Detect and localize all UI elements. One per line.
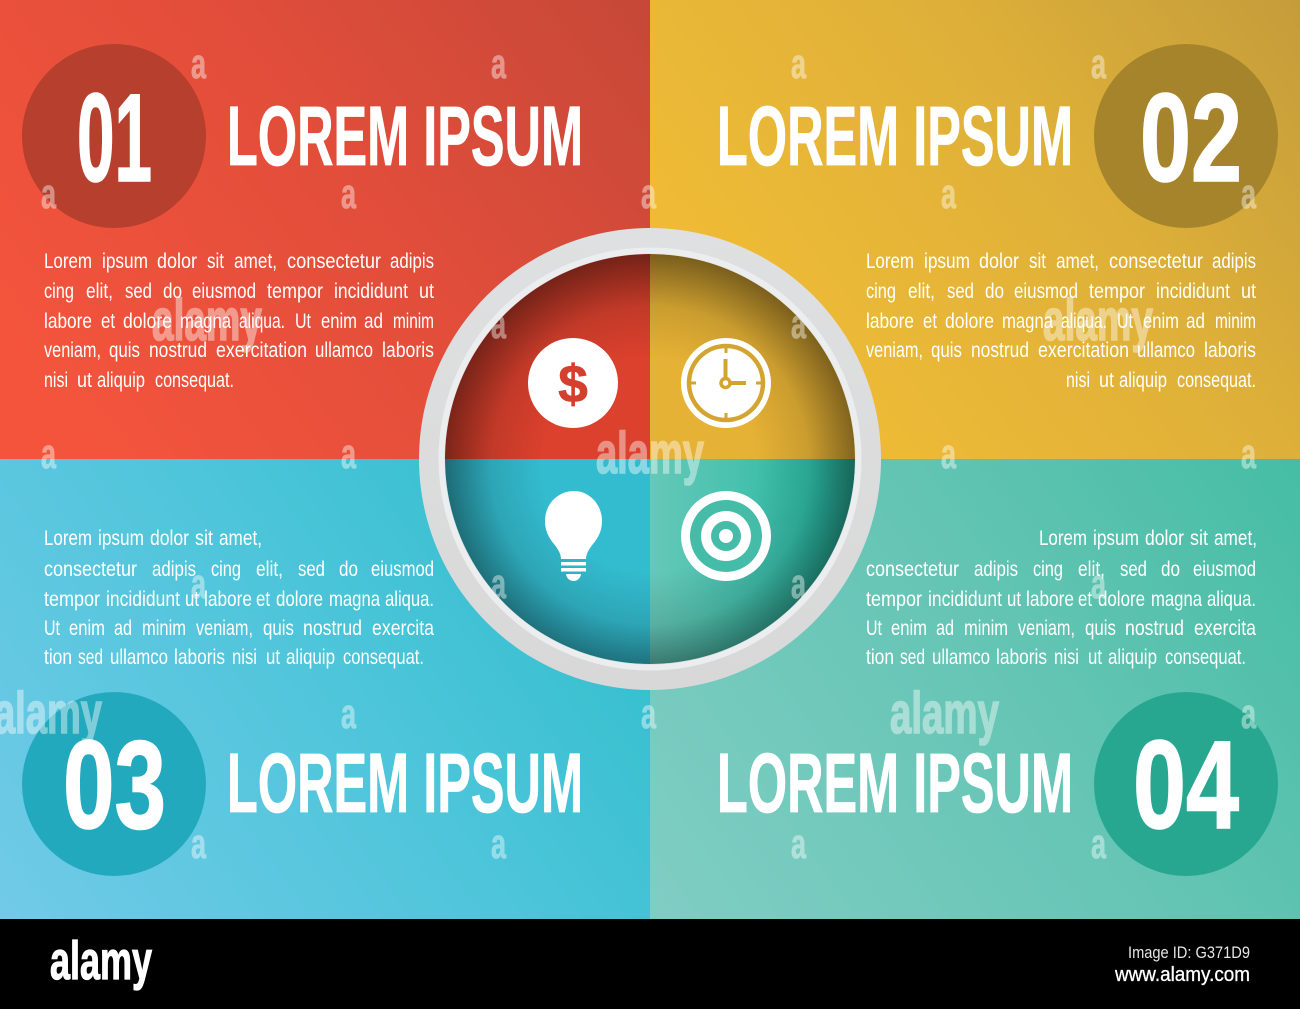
- text block 3: ut: [185, 587, 199, 611]
- text block 3: sit: [195, 526, 213, 550]
- text block 4: sit: [1190, 526, 1208, 550]
- text block 4: enim: [891, 616, 927, 640]
- text block 2: cing: [866, 279, 896, 303]
- text block 2: sit: [1029, 249, 1046, 273]
- number badge 02: 02: [1140, 69, 1242, 208]
- text block 4: veniam,: [1018, 616, 1075, 640]
- watermark letters: a: [1241, 690, 1256, 737]
- heading 4: LOREM IPSUM: [717, 736, 1073, 830]
- watermark letters: a: [41, 430, 56, 477]
- text block 4: ut: [1088, 645, 1102, 669]
- text block 1: labore: [44, 309, 92, 333]
- text block 3: nostrud: [303, 616, 362, 640]
- watermark letters: a: [1091, 40, 1106, 87]
- text block 3: incididunt: [106, 587, 180, 611]
- text block 4: cing: [1033, 557, 1063, 581]
- text block 1: tempor: [267, 279, 323, 303]
- text block 2: ad: [1186, 309, 1205, 333]
- text block 3: ad: [114, 616, 132, 640]
- watermark letters: a: [491, 560, 506, 607]
- watermark letters: a: [791, 40, 806, 87]
- panel: red quadrant: [0, 0, 650, 459]
- text block 1: quis: [109, 338, 140, 362]
- text block 3: labore: [204, 587, 252, 611]
- text block 1: et: [101, 309, 115, 333]
- watermark letters: [41, 40, 1256, 867]
- text block 2: ut: [1099, 368, 1114, 392]
- watermark letters: a: [491, 300, 506, 347]
- text block 1: nisi: [44, 368, 68, 392]
- text block 3: aliquip: [286, 645, 335, 669]
- text block 2: magna: [1002, 309, 1053, 333]
- text block 2: [866, 249, 1256, 392]
- central circle quadrants: [440, 250, 860, 669]
- text block 4: laboris: [996, 645, 1047, 669]
- text block 2: eiusmod: [1014, 279, 1078, 303]
- text block 4: consequat.: [1165, 645, 1246, 669]
- text block 2: consectetur: [1109, 249, 1203, 273]
- text block 4: Lorem: [1039, 526, 1087, 550]
- text block 2: amet,: [1056, 249, 1099, 273]
- text block 1: ullamco: [315, 338, 373, 362]
- text block 4: ad: [936, 616, 954, 640]
- text block 1: [44, 249, 434, 392]
- text block 2: Ut: [1117, 309, 1133, 333]
- text block 4: ut: [1007, 587, 1021, 611]
- text block 3: [44, 526, 434, 669]
- text block 1: aliquip: [97, 368, 145, 392]
- text block 3: minim: [142, 616, 186, 640]
- text block 3: Ut: [44, 616, 60, 640]
- text block 3: enim: [69, 616, 105, 640]
- watermark letters: a: [491, 40, 506, 87]
- icon: light bulb: [545, 491, 602, 581]
- text block 3: consectetur: [44, 557, 137, 581]
- text block 3: nisi: [232, 645, 257, 669]
- watermark letters: a: [191, 560, 206, 607]
- text block 2: laboris: [1204, 338, 1256, 362]
- text block 4: nostrud: [1125, 616, 1184, 640]
- text block 3: ullamco: [110, 645, 168, 669]
- text block 1: magna: [180, 309, 231, 333]
- text block 1: veniam,: [44, 338, 101, 362]
- text block 2: nostrud: [971, 338, 1029, 362]
- text block 4: exercita: [1194, 616, 1256, 640]
- text block 2: adipis: [1212, 249, 1256, 273]
- text block 1: Ut: [295, 309, 311, 333]
- text block 2: sed: [947, 279, 974, 303]
- number badge 01: [22, 44, 206, 228]
- text block 4: [866, 526, 1257, 669]
- text block 4: Ut: [866, 616, 882, 640]
- text block 4: ullamco: [932, 645, 990, 669]
- text block 1: Lorem: [44, 249, 92, 273]
- text block 1: dolor: [157, 249, 197, 273]
- text block 2: aliqua.: [1061, 309, 1107, 333]
- text block 3: dolore: [276, 587, 323, 611]
- number badge 04: [1094, 692, 1278, 876]
- watermark letters: a: [341, 690, 356, 737]
- text block 4: aliquip: [1108, 645, 1157, 669]
- text block 2: nisi: [1066, 368, 1090, 392]
- text block 2: do: [985, 279, 1004, 303]
- text block 1: ad: [364, 309, 383, 333]
- text block 2: enim: [1143, 309, 1179, 333]
- panel: teal quadrant: [650, 459, 1300, 919]
- number badge 03: 03: [63, 716, 166, 855]
- text block 1: dolore: [123, 309, 172, 333]
- watermark letters: a: [1091, 560, 1106, 607]
- text block 4: incididunt: [928, 587, 1002, 611]
- text block 1: minim: [393, 309, 434, 333]
- text block 3: aliqua.: [385, 587, 434, 611]
- text block 3: elit,: [256, 557, 283, 581]
- text block 2: exercitation: [1038, 338, 1129, 362]
- watermark letters: a: [941, 170, 956, 217]
- text block 3: ut: [266, 645, 280, 669]
- text block 2: veniam,: [866, 338, 923, 362]
- text block 3: do: [339, 557, 358, 581]
- text block 3: amet,: [219, 526, 262, 550]
- heading 1: LOREM IPSUM: [227, 89, 583, 183]
- grey ring around central circle: [419, 228, 881, 690]
- text block 1: cing: [44, 279, 74, 303]
- text block 3: sed: [78, 645, 103, 669]
- text block 2: elit,: [908, 279, 935, 303]
- text block 3: exercita: [372, 616, 434, 640]
- icon: target: [681, 491, 771, 581]
- number badge 04: 04: [1133, 716, 1239, 855]
- number badge 03: [22, 692, 206, 876]
- text block 2: ut: [1241, 279, 1256, 303]
- text block 1: consequat.: [155, 368, 234, 392]
- text block 2: minim: [1215, 309, 1256, 333]
- text block 2: ullamco: [1137, 338, 1195, 362]
- text block 2: et: [923, 309, 937, 333]
- text block 3: tion: [44, 645, 72, 669]
- number badge 01: 01: [77, 69, 152, 208]
- text block 4: dolore: [1098, 587, 1145, 611]
- watermark letters: a: [1241, 170, 1256, 217]
- text block 1: laboris: [382, 338, 434, 362]
- watermark letters: a: [791, 820, 806, 867]
- watermark letters: a: [41, 170, 56, 217]
- watermark letters: a: [1241, 430, 1256, 477]
- icon: dollar coin: [528, 338, 618, 428]
- text block 1: consectetur: [287, 249, 381, 273]
- watermark letters: a: [791, 300, 806, 347]
- watermark logos: alamy: [152, 288, 262, 353]
- text block 4: labore: [1026, 587, 1074, 611]
- text block 1: ut: [77, 368, 92, 392]
- text block 2: aliquip: [1119, 368, 1167, 392]
- text block 3: cing: [211, 557, 241, 581]
- watermark letters: a: [641, 170, 656, 217]
- watermark logos: [0, 288, 1153, 746]
- watermark letters: a: [341, 170, 356, 217]
- text block 3: dolor: [150, 526, 189, 550]
- text block 1: sed: [125, 279, 152, 303]
- text block 1: exercitation: [216, 338, 307, 362]
- watermark logos: alamy: [890, 681, 999, 746]
- text block 4: sed: [1120, 557, 1147, 581]
- text block 4: do: [1161, 557, 1180, 581]
- text block 3: ipsum: [98, 526, 144, 550]
- text block 3: consequat.: [343, 645, 424, 669]
- text block 4: magna: [1151, 587, 1202, 611]
- text block 4: quis: [1085, 616, 1116, 640]
- panel: yellow quadrant: [650, 0, 1300, 459]
- watermark letters: a: [791, 560, 806, 607]
- text block 4: minim: [964, 616, 1008, 640]
- text block 3: eiusmod: [371, 557, 434, 581]
- text block 4: sed: [900, 645, 925, 669]
- text block 1: amet,: [234, 249, 277, 273]
- watermark letters: a: [641, 690, 656, 737]
- text block 3: tempor: [44, 587, 100, 611]
- text block 3: quis: [263, 616, 294, 640]
- text block 1: aliqua.: [239, 309, 285, 333]
- text block 4: elit,: [1078, 557, 1105, 581]
- text block 3: laboris: [174, 645, 225, 669]
- text block 4: tion: [866, 645, 894, 669]
- text block 2: incididunt: [1156, 279, 1230, 303]
- text block 1: ut: [419, 279, 434, 303]
- text block 4: dolor: [1145, 526, 1184, 550]
- text block 1: elit,: [86, 279, 113, 303]
- text block 1: do: [163, 279, 182, 303]
- text block 4: amet,: [1214, 526, 1257, 550]
- text block 1: eiusmod: [192, 279, 256, 303]
- text block 4: consectetur: [866, 557, 959, 581]
- footer logo: alamy: [50, 931, 152, 991]
- footer url: www.alamy.com: [1114, 964, 1250, 986]
- text block 3: magna: [329, 587, 380, 611]
- text block 1: sit: [207, 249, 224, 273]
- text block 1: incididunt: [334, 279, 408, 303]
- watermark letters: a: [1091, 820, 1106, 867]
- text block 2: labore: [866, 309, 914, 333]
- text block 2: quis: [931, 338, 962, 362]
- watermark letters: a: [491, 820, 506, 867]
- text block 4: aliqua.: [1207, 587, 1256, 611]
- text block 4: nisi: [1054, 645, 1079, 669]
- watermark letters: a: [341, 430, 356, 477]
- text block 1: enim: [321, 309, 357, 333]
- text block 3: Lorem: [44, 526, 92, 550]
- heading 2: LOREM IPSUM: [717, 89, 1073, 183]
- text block 4: et: [1078, 587, 1092, 611]
- text block 2: consequat.: [1177, 368, 1256, 392]
- text block 1: nostrud: [149, 338, 207, 362]
- icon: clock: [681, 338, 771, 428]
- text block 3: et: [256, 587, 270, 611]
- footer bar: [0, 919, 1300, 1009]
- text block 4: eiusmod: [1193, 557, 1256, 581]
- text block 2: dolor: [979, 249, 1019, 273]
- number badge 02: [1094, 44, 1278, 228]
- text block 2: tempor: [1089, 279, 1145, 303]
- text block 3: sed: [298, 557, 325, 581]
- footer image id: Image ID: G371D9: [1128, 943, 1250, 962]
- text block 2: ipsum: [924, 249, 970, 273]
- watermark logos: alamy: [596, 421, 704, 486]
- watermark letters: a: [941, 430, 956, 477]
- text block 1: adipis: [390, 249, 434, 273]
- text block 4: ipsum: [1093, 526, 1139, 550]
- watermark logos: alamy: [1043, 288, 1153, 353]
- panel: blue quadrant: [0, 459, 650, 919]
- watermark letters: a: [191, 820, 206, 867]
- text block 2: Lorem: [866, 249, 914, 273]
- icon: dollar coin: $: [558, 355, 588, 414]
- text block 4: adipis: [974, 557, 1018, 581]
- text block 3: veniam,: [196, 616, 253, 640]
- text block 3: adipis: [152, 557, 196, 581]
- text block 2: dolore: [945, 309, 994, 333]
- text block 4: tempor: [866, 587, 922, 611]
- text block 1: ipsum: [102, 249, 148, 273]
- watermark letters: a: [191, 40, 206, 87]
- heading 3: LOREM IPSUM: [227, 736, 583, 830]
